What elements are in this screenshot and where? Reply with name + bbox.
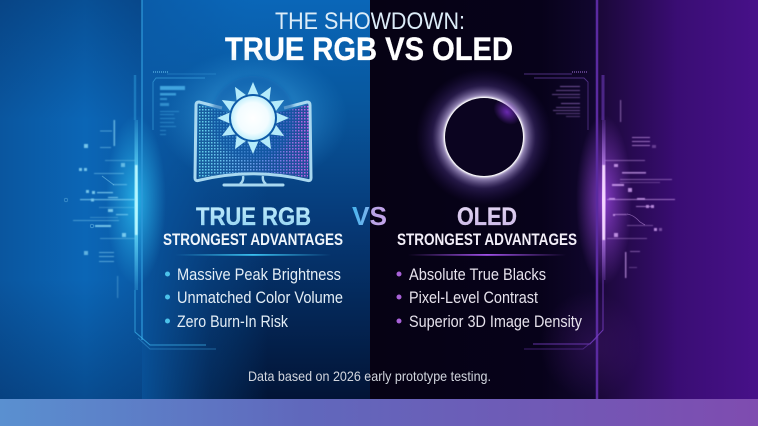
right panel frame: [524, 0, 603, 399]
subheading: OLED advantages: STRONGEST ADVANTAGES: [397, 230, 577, 249]
right side circuit decoration: [576, 100, 675, 285]
list: True RGB advantages: Unmatched Color Volume: [177, 288, 343, 307]
list: OLED advantages: [396, 265, 582, 331]
VS badge: VS: [352, 201, 387, 231]
icon: eclipse: [416, 69, 552, 205]
title: THE SHOWDOWN:: [275, 8, 465, 35]
background: purple half: [370, 0, 758, 399]
icon: curved monitor with sun: [158, 50, 348, 186]
heading: OLED: OLED: [457, 203, 517, 231]
panel: OLED: [396, 203, 582, 331]
list: OLED advantages: Superior 3D Image Density: [409, 312, 582, 331]
monitor bezel and stand: [195, 102, 311, 185]
left panel frame: [135, 0, 216, 349]
background: blue half: [0, 0, 370, 399]
title: [225, 8, 513, 67]
heading: True RGB: TRUE RGB: [196, 203, 311, 231]
list: True RGB advantages: Zero Burn-In Risk: [177, 312, 288, 331]
panel: True RGB: [163, 203, 343, 331]
monitor screen pixels: [198, 104, 309, 178]
sun: [211, 76, 295, 160]
title: TRUE RGB VS OLED: [225, 31, 513, 67]
subheading: True RGB advantages: STRONGEST ADVANTAGES: [163, 230, 343, 249]
list: True RGB advantages: Massive Peak Brightness: [177, 265, 341, 284]
list: OLED advantages: Absolute True Blacks: [409, 265, 546, 284]
left side circuit decoration: [64, 115, 166, 298]
bottom gradient band: [0, 399, 758, 426]
footnote: Data based on 2026 early prototype testing.: [248, 368, 491, 384]
list: OLED advantages: Pixel-Level Contrast: [409, 288, 538, 307]
list: True RGB advantages: [165, 265, 343, 331]
